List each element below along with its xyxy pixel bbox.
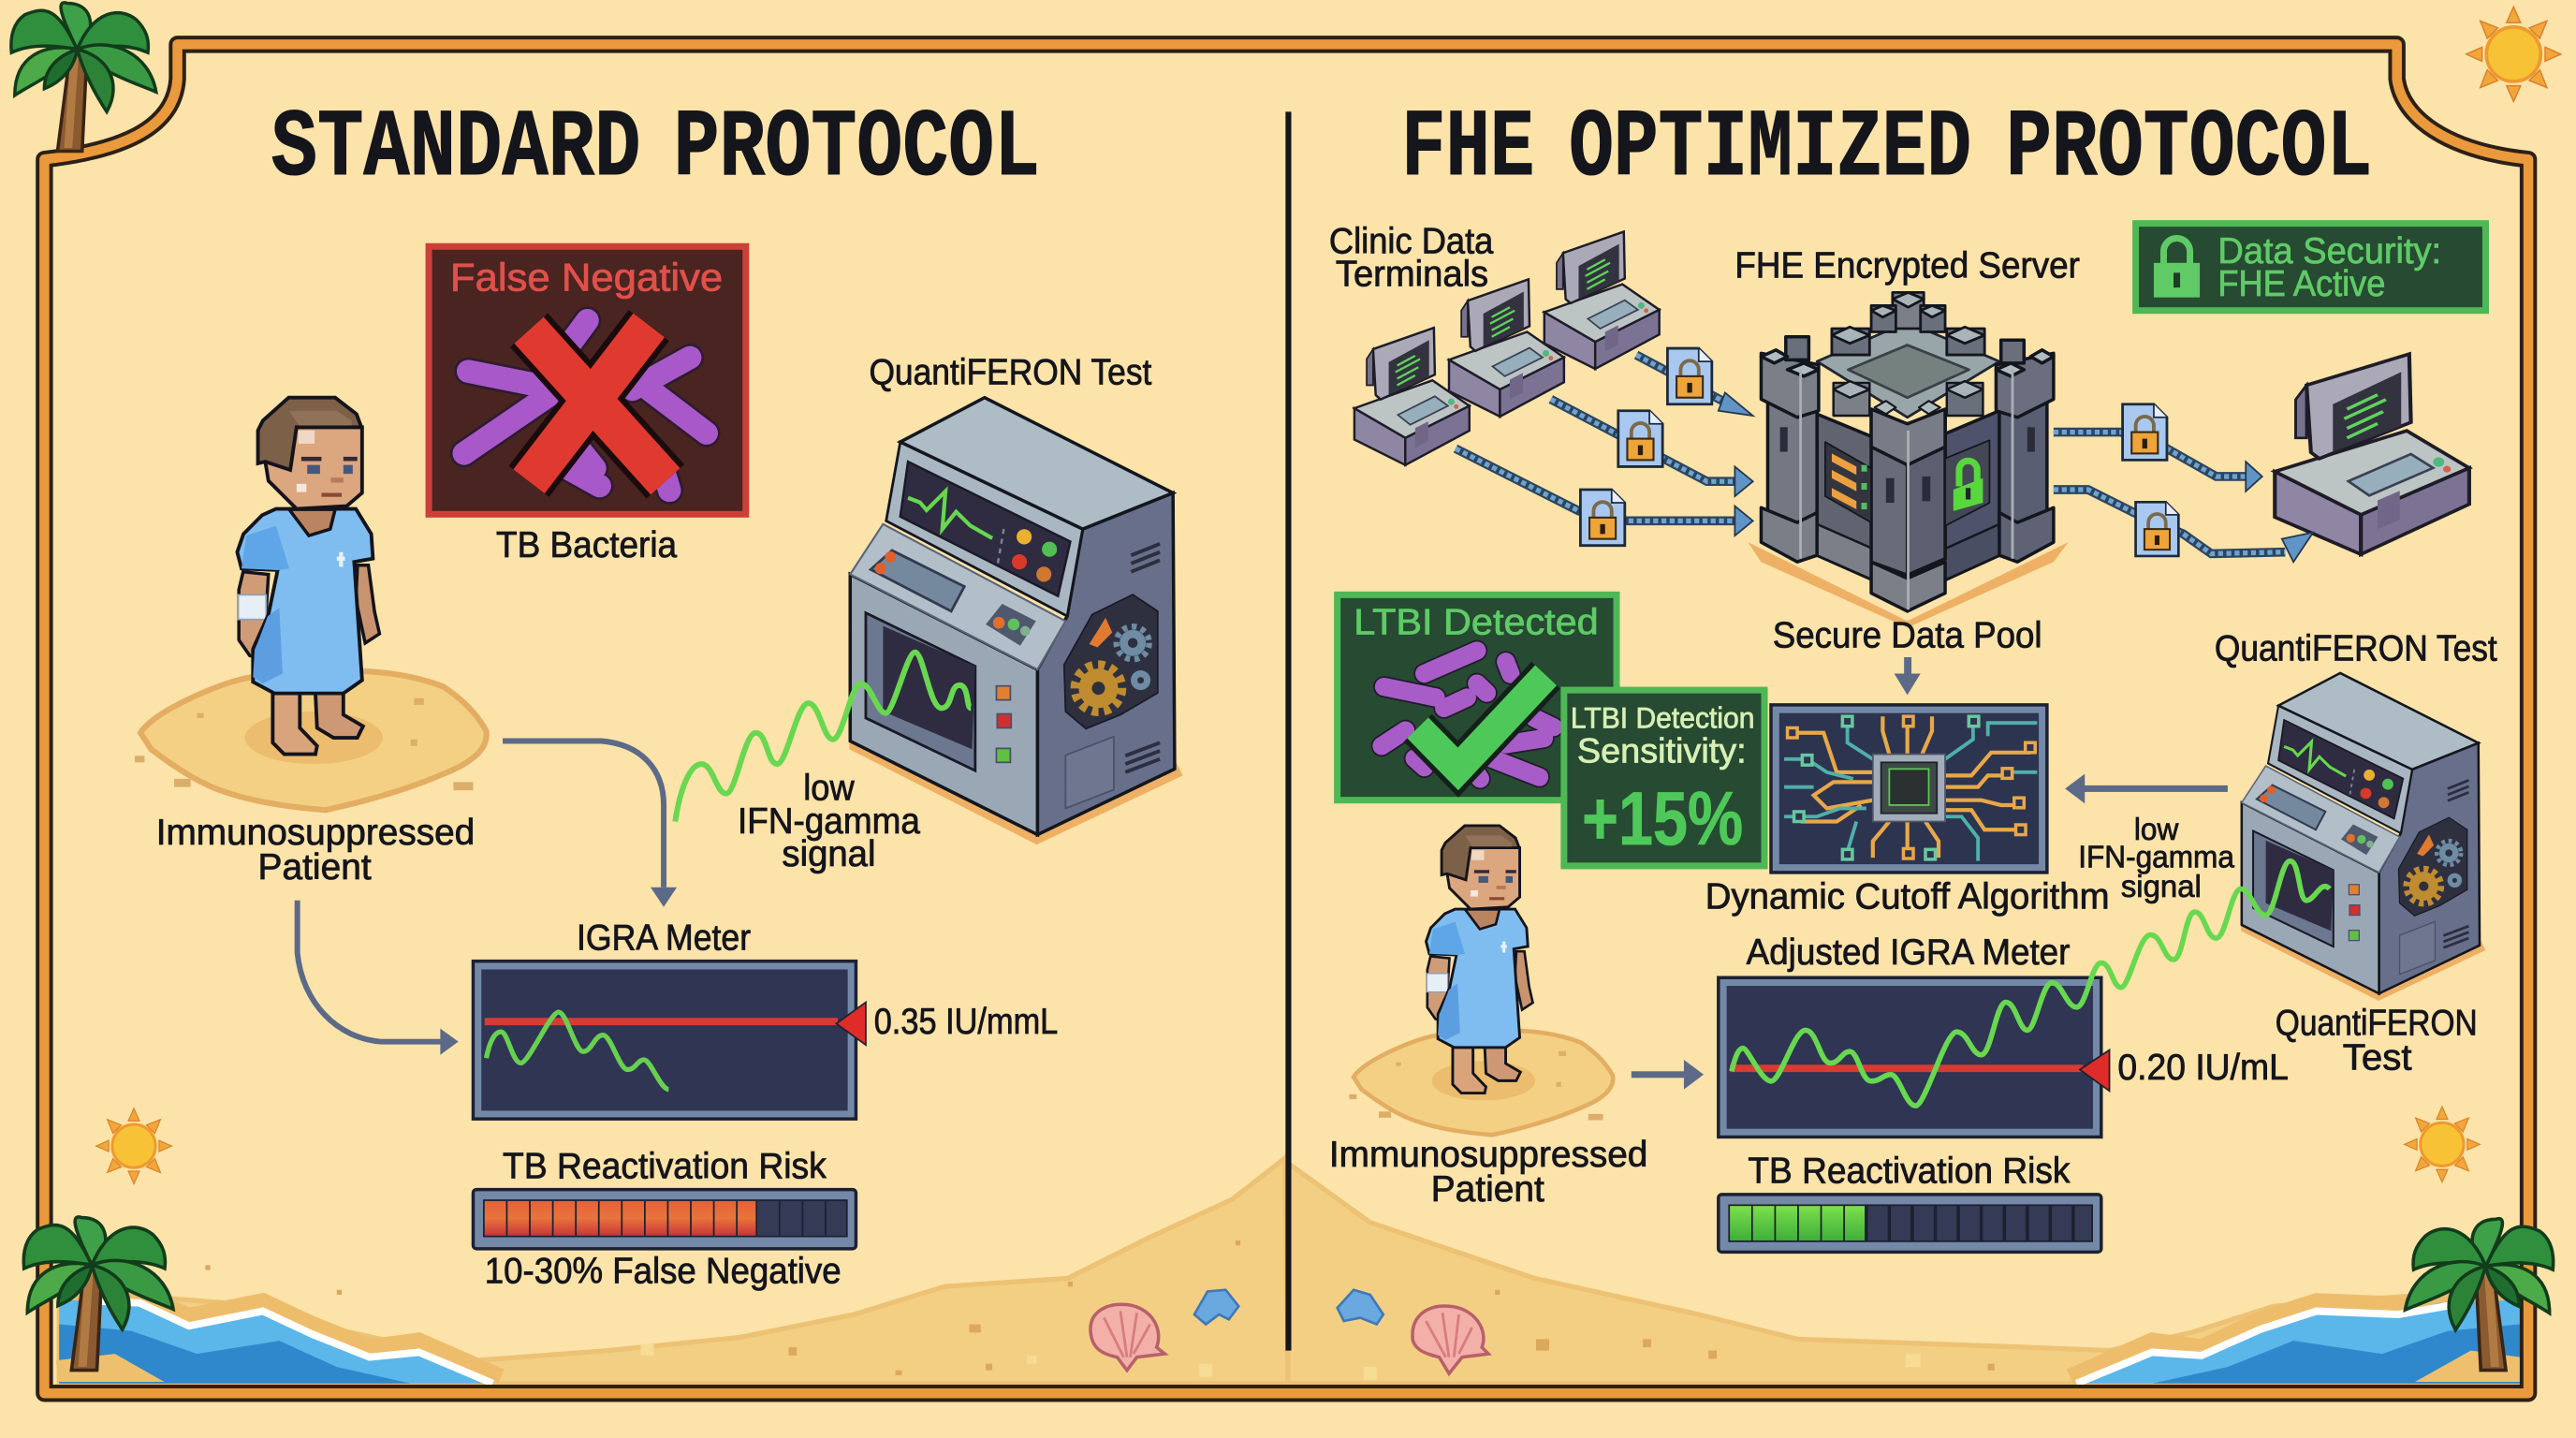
label: IGRA meter: IGRA Meter [577,917,751,958]
title: standard protocol: STANDARD [271,95,640,203]
title: FHE optimized protocol: FHE [1401,95,1534,203]
risk bar left [473,1190,856,1249]
terminal 3 [1544,231,1660,369]
label: FHE encrypted server: FHE Encrypted Server [1734,246,2080,286]
badge: data security: Data Security: [2217,231,2441,271]
circuit pads [1788,716,2035,858]
arrow: patient to adjusted meter [1632,1060,1704,1090]
encrypted flow: terminal 3 to server [1636,348,1753,416]
title: FHE optimized protocol: OPTIMIZED [1569,95,1971,203]
terminal 2 [1449,279,1564,417]
label: immunosuppressed patient right: Immunosuppressed [1329,1135,1647,1175]
label: secure data pool: Secure Data Pool [1773,615,2042,655]
label: immunosuppressed patient right: Patient [1431,1169,1544,1210]
icon: palm tree bottom left [23,1217,173,1371]
label: low IFN-gamma signal right [2078,813,2234,904]
label: immunosuppressed patient right [1329,1135,1647,1210]
label: immunosuppressed patient left [156,813,475,888]
label: low IFN-gamma signal right: low [2134,813,2179,847]
title: standard protocol: PROTOCOL [674,95,1040,203]
beach sand: left [59,1158,1288,1384]
panel: false negative [429,246,746,514]
label: threshold value left: 0.35 IU/mmL [874,1002,1058,1042]
icon: bacteria [1382,651,1554,779]
badge: data security: FHE Active [2217,264,2385,304]
label: clinic data terminals [1329,221,1494,294]
tower windows [1780,427,2035,503]
sand specks [205,1240,1995,1380]
machine left [849,398,1183,844]
icon: sun right [2405,1107,2480,1182]
panel: LTBI sensitivity: LTBI Detection [1571,700,1754,734]
label: dynamic cutoff algorithm: Dynamic Cutoff Algorithm [1705,877,2110,917]
castle walls [1817,414,1873,580]
beach sand: right [1288,1164,2520,1384]
deck front crenels [1834,381,1983,416]
icon: sun left [96,1108,171,1183]
chip [1873,755,1945,822]
icon: palm tree top left [11,3,156,151]
sea: left [56,1291,501,1384]
green padlock on server [1945,440,1989,526]
label: quantiferon test right bottom: Test [2343,1038,2412,1078]
encrypted flow: server to terminal upper [2054,404,2262,492]
label: quantiferon test right bottom: QuantiFERON [2276,1004,2478,1044]
label: low IFN-gamma signal left: signal [782,834,875,874]
server rack [1825,442,1871,522]
terminal 1 [1354,328,1470,465]
risk bar right [1719,1195,2101,1252]
badge: data security [2136,224,2485,311]
signal wave left [675,653,971,822]
front tower [1871,401,1945,611]
label: false negative rate: 10-30% False Negative [485,1252,842,1292]
label: clinic data terminals: Clinic Data [1329,221,1494,261]
label: low IFN-gamma signal left: low [803,769,855,809]
panel: LTBI detected [1338,594,1617,800]
circuit traces [1793,716,2030,858]
left tower [1761,337,1819,562]
right tower [1996,340,2054,562]
label: TB reactivation risk left: TB Reactivation Risk [503,1146,827,1186]
title: standard protocol [271,95,1040,203]
back turrets [1832,292,1984,355]
arrow: data pool to algorithm [1895,657,1921,695]
icon: blue shell right [1338,1290,1383,1325]
label: clinic data terminals: Terminals [1336,254,1488,294]
label: TB reactivation risk right: TB Reactivation Risk [1748,1152,2071,1192]
title: FHE optimized protocol: PROTOCOL [2006,95,2372,203]
icon: sun top right [2466,7,2561,101]
label: immunosuppressed patient left: Immunosuppressed [156,813,475,853]
castle top deck [1817,322,1999,418]
patient right [1349,826,1613,1135]
panel: LTBI sensitivity: +15% [1582,777,1743,861]
label: quantiferon test left: QuantiFERON Test [869,353,1152,393]
icon: red cross [529,325,666,481]
icon: pink shell left [1090,1304,1164,1371]
panel: dynamic cutoff algorithm chip [1771,705,2047,873]
label: low IFN-gamma signal right: IFN-gamma [2078,841,2234,875]
sea: right [2070,1291,2520,1384]
patient left [135,398,487,810]
panel: LTBI sensitivity: Sensitivity: [1577,731,1747,770]
title: FHE optimized protocol [1401,95,2372,203]
label: TB bacteria: TB Bacteria [496,525,678,565]
panel heading: False Negative [450,256,723,300]
icon: palm tree bottom right [2406,1219,2554,1371]
IGRA meter [473,961,866,1119]
label: low IFN-gamma signal left [738,769,920,874]
icon: padlock [2154,238,2200,298]
adjusted IGRA meter [1719,977,2110,1137]
label: threshold value right: 0.20 IU/mL [2117,1048,2289,1088]
signal wave right [1732,861,2330,1106]
icon: bacteria [464,320,707,491]
label: quantiferon test right top: QuantiFERON Test [2215,629,2497,669]
label: adjusted IGRA meter: Adjusted IGRA Meter [1747,932,2071,973]
divider between protocols [1285,111,1292,1351]
label: quantiferon test right bottom [2276,1004,2478,1078]
label: immunosuppressed patient left: Patient [258,847,372,888]
panel: LTBI sensitivity [1564,690,1764,866]
encrypted flow: terminal 2 to server [1551,399,1753,496]
label: low IFN-gamma signal left: IFN-gamma [738,801,920,842]
encrypted flow: server to terminal lower [2054,490,2313,562]
FHE server castle [1748,292,2069,627]
arrow: machine to algorithm [2065,774,2228,803]
receiving terminal [2275,354,2469,554]
machine right [2241,673,2485,1001]
encrypted flow: terminal 1 to server [1456,448,1753,546]
panel heading: LTBI Detected [1354,602,1599,642]
icon: green check [1418,675,1546,769]
icon: pink shell right [1412,1306,1488,1373]
arrow: patient to meter upper [503,741,677,907]
panel background [429,246,746,514]
icon: blue shell left [1194,1290,1238,1325]
arrow: patient to meter lower [298,901,459,1055]
label: low IFN-gamma signal right: signal [2121,870,2202,904]
